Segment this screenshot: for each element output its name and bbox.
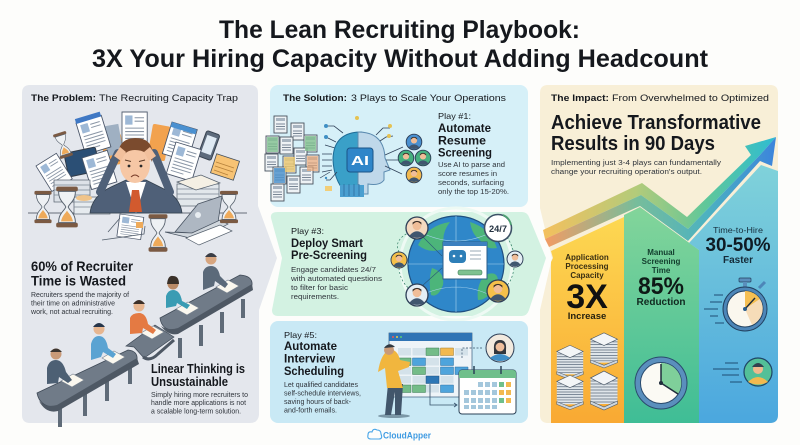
column: screening time: Time <box>652 266 671 275</box>
problem heading: The Problem: <box>31 93 96 103</box>
panel: play 1 <box>265 85 528 207</box>
worker 5 <box>203 253 228 290</box>
play 5 text <box>284 330 361 414</box>
callout: 60% wasted: work, not actual recruiting. <box>30 309 113 316</box>
play 1 text: Automate <box>438 121 491 135</box>
solution heading: 3 Plays to Scale Your Operations <box>351 93 507 103</box>
play 3 text: Pre-Screening <box>291 248 367 262</box>
callout: linear thinking: Simply hiring more recruiters to <box>151 392 248 399</box>
logo: CloudApper: CloudApper <box>383 430 431 440</box>
worker 2 <box>91 323 116 360</box>
panel: the impact <box>540 85 778 423</box>
play 3 text: Play #3: <box>291 226 324 236</box>
impact headline: Results in 90 Days <box>551 133 715 155</box>
illustration: globe chatbot <box>391 208 523 320</box>
panel: play 5 <box>270 321 528 423</box>
solution heading <box>283 93 507 103</box>
play 5 text: saving hours of back- <box>284 399 352 406</box>
play 5 text: Play #5: <box>284 330 317 340</box>
callout: linear thinking: a scalable long-term solution. <box>151 408 241 416</box>
play 1 text: Use AI to parse and <box>438 162 505 169</box>
solution heading: The Solution: <box>283 93 347 103</box>
icon: fast candidate <box>713 358 772 386</box>
play 5 text: and-forth emails. <box>284 408 337 414</box>
worker 3 <box>130 300 156 334</box>
title: 3X Your Hiring Capacity Without Adding Headcount <box>92 45 709 73</box>
play 3 text: with automated questions <box>290 276 383 283</box>
callout: 60% wasted <box>30 258 134 316</box>
column: screening time: 85% <box>638 273 684 300</box>
play 3 text: to filter for basic <box>291 285 349 292</box>
play 3 text: Deploy Smart <box>291 236 363 250</box>
column: time to hire: 30-50% <box>706 235 771 256</box>
callout: 60% wasted: Recruiters spend the majority of <box>31 292 129 299</box>
column: application capacity: Capacity <box>570 271 604 280</box>
callout: linear thinking: handle more applications is not <box>151 400 246 407</box>
play 1 text: seconds, surfacing <box>438 180 504 187</box>
title <box>92 16 709 73</box>
icon: clock <box>635 357 687 409</box>
illustration: AI resume parsing <box>265 116 431 201</box>
impact headline: change your recruiting operation's output. <box>551 169 702 176</box>
play 1 text: score resumes in <box>438 171 497 178</box>
column: time to hire: Faster <box>723 255 753 266</box>
column: screening time: Screening <box>642 257 680 266</box>
column: time to hire <box>689 165 778 423</box>
worker 1 <box>47 348 72 384</box>
column: screening time <box>624 207 699 423</box>
play 1 text: Screening <box>438 146 492 160</box>
column: time to hire: Time-to-Hire <box>713 225 763 235</box>
column: screening time: Reduction <box>637 297 685 308</box>
impact headline: Achieve Transformative <box>551 112 761 134</box>
play 3 text: Engage candidates 24/7 <box>291 267 376 274</box>
column: application capacity <box>551 217 624 423</box>
icon: stopwatch <box>704 278 767 331</box>
play 5 text: Scheduling <box>284 364 344 378</box>
column: application capacity: Processing <box>565 262 609 271</box>
arrow: growth trend <box>543 137 776 247</box>
column: application capacity: 3X <box>566 278 608 316</box>
callout: 60% wasted: Time is Wasted <box>31 272 126 288</box>
icon: resume stacks <box>557 333 618 410</box>
play 1 text: only the top 15-20%. <box>438 189 509 196</box>
play 1 text: Play #1: <box>438 111 471 121</box>
illustration: broken conveyor belts <box>37 253 253 427</box>
illustration: calendar scheduling <box>378 333 516 418</box>
play 3 text: requirements. <box>291 294 339 301</box>
problem heading: The Recruiting Capacity Trap <box>99 93 238 103</box>
column: screening time: Manual <box>647 248 675 257</box>
illustration: AI resume parsing: AI <box>351 153 369 168</box>
illustration: globe chatbot: 24/7 <box>489 224 507 234</box>
play 5 text: Let qualified candidates <box>284 382 358 389</box>
play 1 text <box>438 111 509 196</box>
play 3 text <box>290 226 383 301</box>
play 5 text: self-schedule interviews, <box>284 390 361 398</box>
impact headline <box>551 112 761 176</box>
impact heading: From Overwhelmed to Optimized <box>612 93 769 103</box>
logo: CloudApper <box>368 429 431 440</box>
play 1 text: Resume <box>438 134 486 148</box>
callout: 60% wasted: 60% of Recruiter <box>31 258 134 274</box>
column: application capacity: Increase <box>568 311 606 322</box>
impact heading: The Impact: <box>551 93 609 103</box>
play 5 text: Automate <box>284 339 337 353</box>
impact headline: Implementing just 3-4 plays can fundamentally <box>551 160 722 167</box>
panel: the problem <box>22 85 277 427</box>
illustration: overwhelmed recruiter <box>28 112 247 252</box>
problem heading <box>31 93 238 103</box>
callout: linear thinking <box>151 362 248 416</box>
callout: linear thinking: Unsustainable <box>151 375 228 389</box>
title: The Lean Recruiting Playbook: <box>219 16 580 44</box>
callout: linear thinking: Linear Thinking is <box>151 362 245 376</box>
column: application capacity: Application <box>565 253 609 262</box>
callout: 60% wasted: their time on administrative <box>31 300 115 308</box>
play 5 text: Interview <box>284 352 336 366</box>
impact heading <box>551 93 769 103</box>
worker 4 <box>166 276 190 309</box>
panel: play 3 <box>271 208 546 320</box>
